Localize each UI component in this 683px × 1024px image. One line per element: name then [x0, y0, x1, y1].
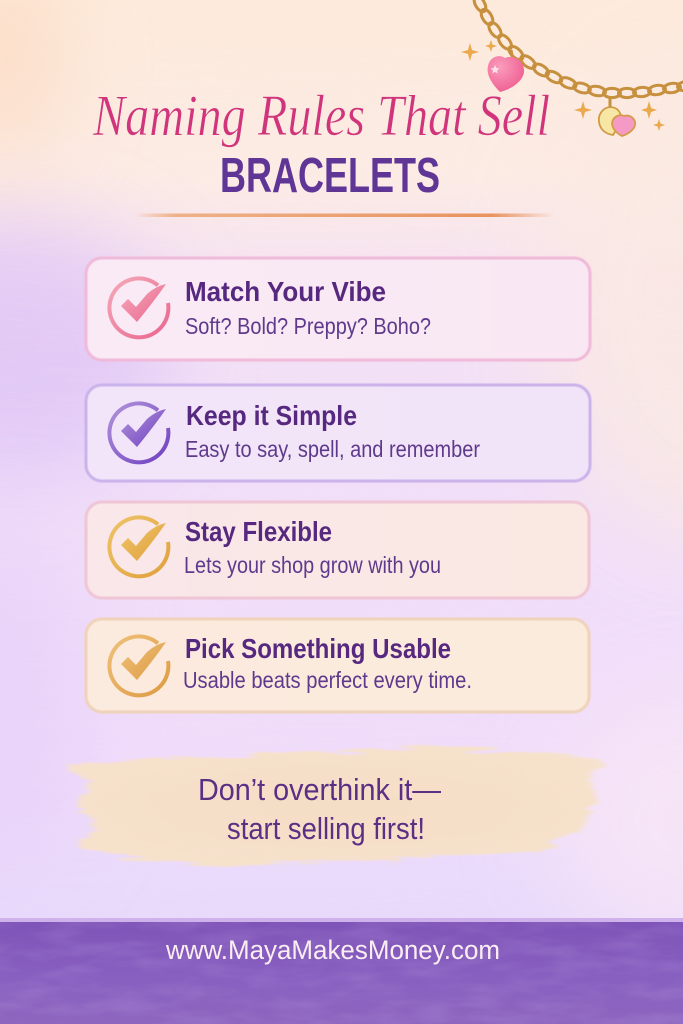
icon: pink check	[109, 278, 168, 337]
icon: orange check	[109, 636, 168, 695]
panel: pick something usable	[86, 619, 589, 712]
brush stroke	[66, 748, 604, 866]
bracelet chain with charms	[461, 0, 683, 136]
icon: gold and pink charm	[599, 107, 635, 136]
icon: purple check	[109, 403, 168, 462]
script heading: Naming Rules That Sell	[92, 83, 550, 148]
divider rule	[135, 214, 555, 217]
icon: gold check	[109, 517, 168, 576]
chain links	[472, 0, 683, 109]
icon: pink heart charm	[488, 56, 524, 92]
body text: Lets your shop grow with you	[184, 552, 441, 578]
panel: match your vibe	[86, 258, 590, 360]
callout text: Don’t overthink it—	[198, 772, 441, 807]
title	[92, 83, 555, 217]
panel: keep it simple	[86, 385, 590, 481]
heading: bracelets: BRACELETS	[220, 149, 440, 203]
icon: sparkles	[461, 40, 665, 131]
body text: Soft? Bold? Preppy? Boho?	[185, 313, 431, 339]
heading text: Keep it Simple	[186, 400, 357, 431]
heading text: Pick Something Usable	[185, 633, 451, 664]
body text: Easy to say, spell, and remember	[185, 436, 480, 462]
heading text: Stay Flexible	[185, 516, 332, 547]
footer band	[0, 918, 683, 1024]
callout: brush stroke message	[66, 748, 604, 866]
website url: www.MayaMakesMoney.com	[165, 935, 500, 965]
heading text: Match Your Vibe	[185, 276, 386, 307]
panel: stay flexible	[86, 502, 589, 598]
callout: brush stroke message: start selling first!	[227, 811, 425, 846]
body text: Usable beats perfect every time.	[183, 667, 472, 693]
